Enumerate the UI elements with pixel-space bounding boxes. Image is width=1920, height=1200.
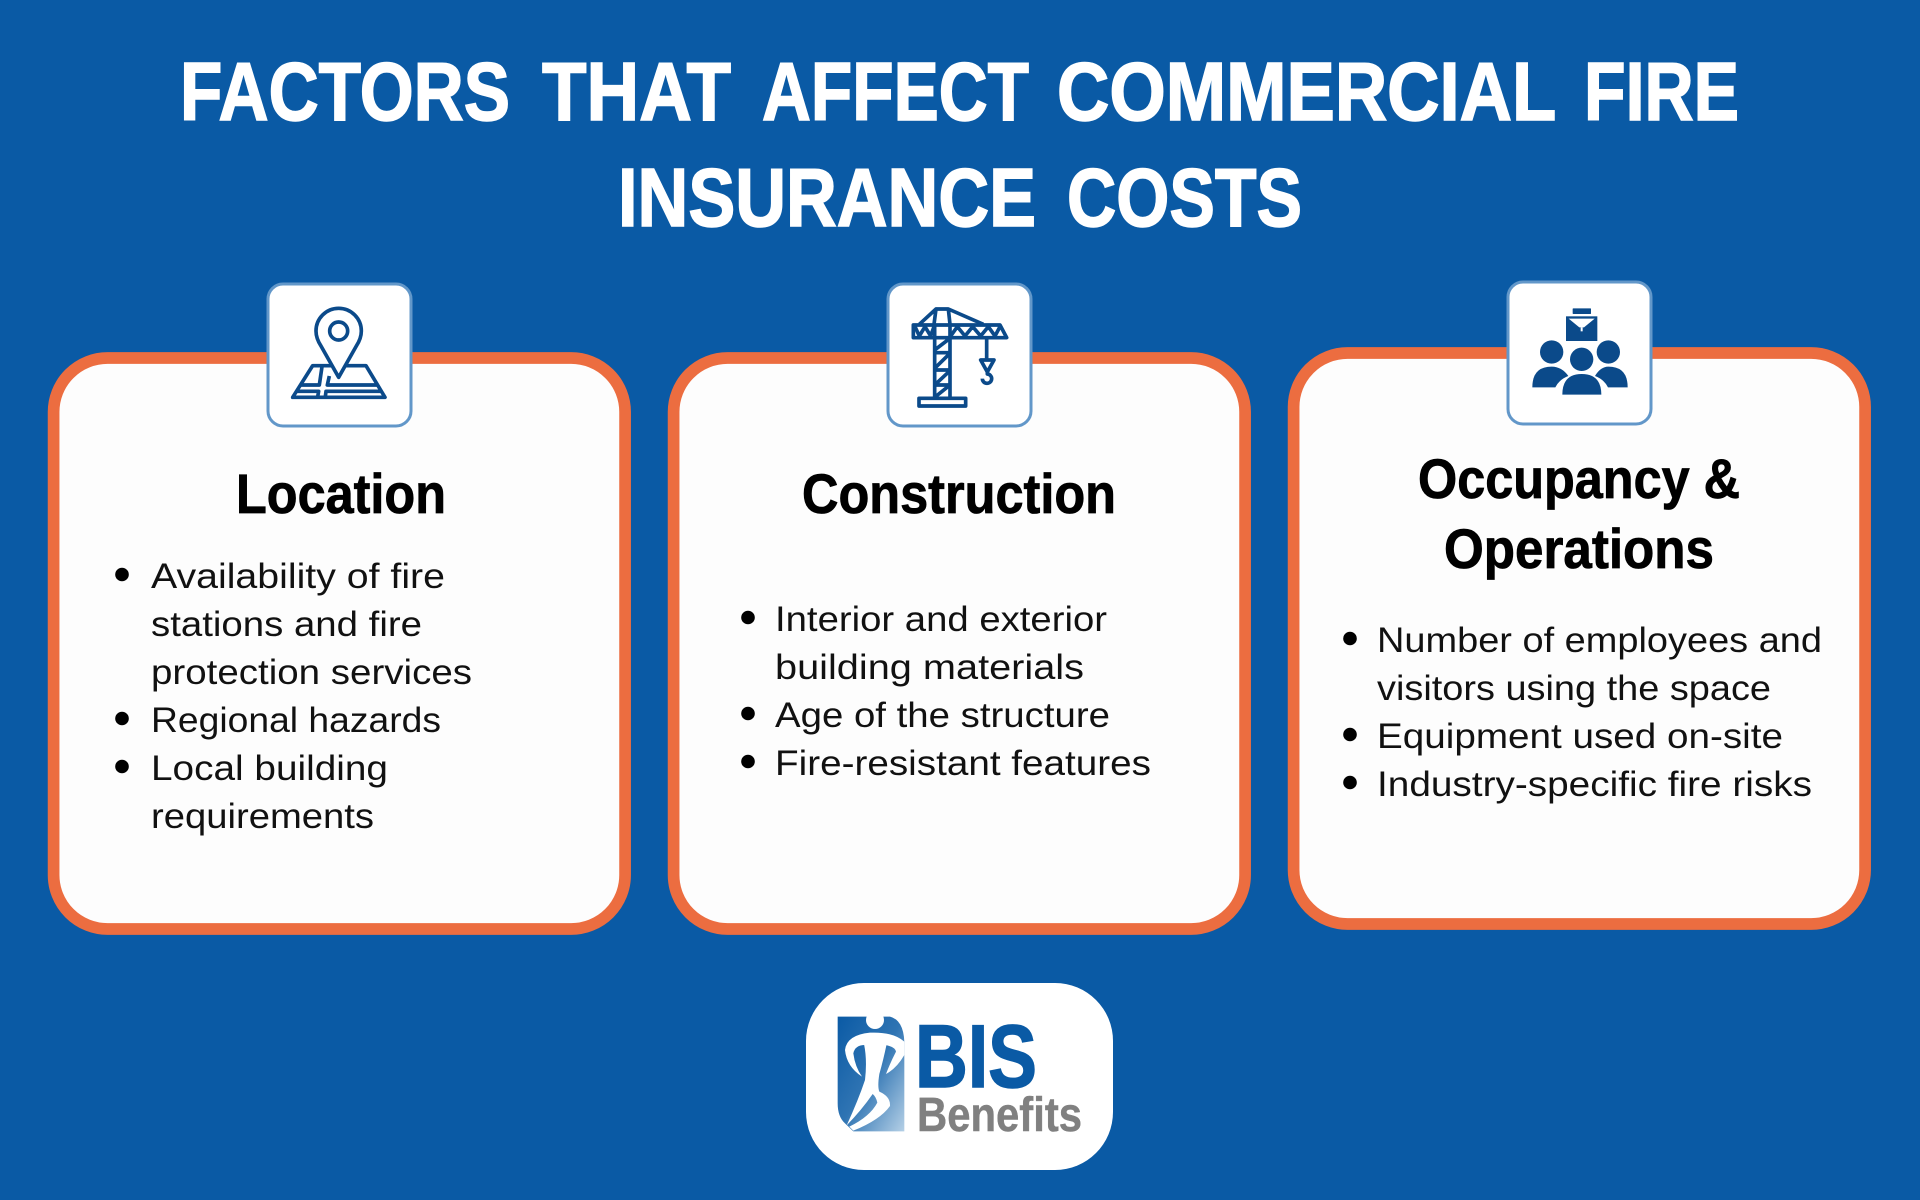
heading: location: Location — [236, 462, 446, 525]
title: THAT — [542, 45, 731, 138]
bullet list: construction: building materials — [775, 648, 1084, 687]
location card — [54, 358, 625, 929]
bullet list: construction: Age of the structure — [775, 696, 1110, 735]
panel: construction — [674, 284, 1245, 929]
icon: map pin — [268, 284, 411, 426]
bullet list: occupancy: visitors using the space — [1377, 669, 1771, 708]
icon: team with briefcase — [1508, 282, 1651, 424]
bullet list: construction — [741, 600, 1151, 783]
heading: occupancy and operations: Occupancy & — [1418, 447, 1740, 510]
bullet list: location: protection services — [151, 653, 472, 692]
title: INSURANCE — [618, 151, 1036, 244]
bullet list: occupancy — [1343, 621, 1822, 804]
occupancy card — [1294, 353, 1865, 924]
title: COMMERCIAL — [1057, 45, 1555, 138]
icon: crane — [888, 284, 1031, 426]
title: AFFECT — [762, 45, 1029, 138]
heading: occupancy and operations — [1418, 447, 1740, 580]
construction card — [674, 358, 1245, 929]
bullet list: location — [115, 557, 472, 836]
panel: occupancy and operations — [1294, 282, 1865, 924]
bullet list: occupancy: Equipment used on-site — [1377, 717, 1783, 756]
title: COSTS — [1067, 151, 1302, 244]
heading: construction: Construction — [802, 462, 1116, 525]
bullet list: location: requirements — [151, 797, 374, 836]
bullet list: location: Availability of fire — [151, 557, 445, 596]
bullet list: occupancy: Number of employees and — [1377, 621, 1822, 660]
logo mark: runner on shield — [838, 1011, 904, 1131]
logo text: BIS: BIS — [915, 1006, 1037, 1106]
logo: BIS Benefits — [806, 983, 1113, 1170]
panel: location — [54, 284, 625, 929]
title: FIRE — [1584, 45, 1739, 138]
bullet list: location: stations and fire — [151, 605, 422, 644]
bullet list: construction: Fire-resistant features — [775, 744, 1151, 783]
bullet list: construction: Interior and exterior — [775, 600, 1107, 639]
heading: occupancy and operations: Operations — [1444, 517, 1714, 580]
bullet list: location: Local building — [151, 749, 388, 788]
bullet list: location: Regional hazards — [151, 701, 441, 740]
title: FACTORS — [180, 45, 510, 138]
logo text: Benefits: Benefits — [917, 1089, 1082, 1142]
bullet list: occupancy: Industry-specific fire risks — [1377, 765, 1812, 804]
